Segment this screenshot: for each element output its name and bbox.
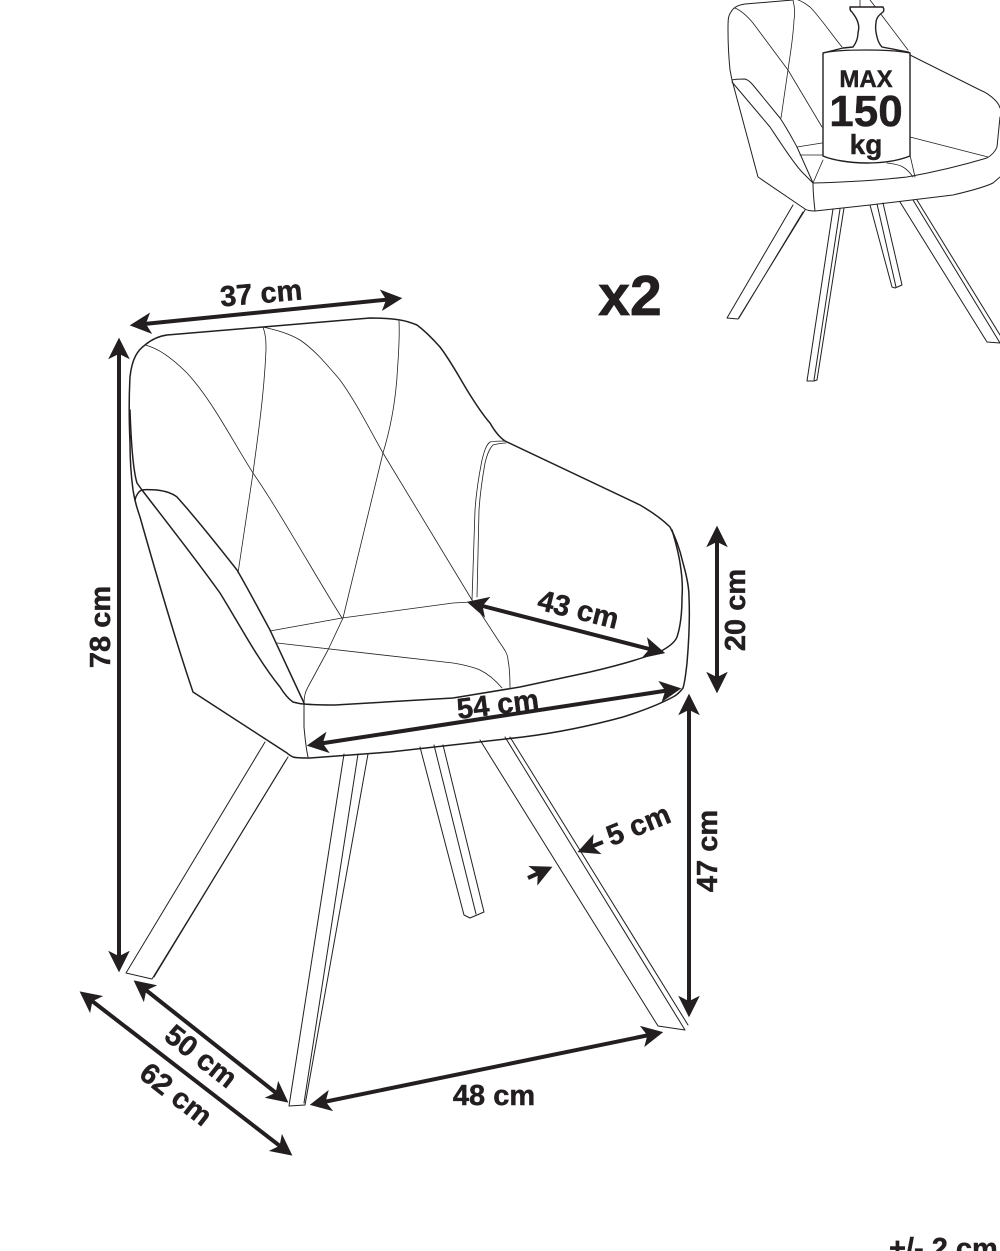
- right leg: [480, 737, 688, 1030]
- seat front edge: [304, 530, 682, 705]
- dimension: 37 cm: 37 cm: [219, 275, 304, 314]
- dimension: 5 cm: [528, 798, 675, 878]
- dimension: 50 cm: [137, 983, 285, 1100]
- weight icon: kg: [850, 129, 882, 160]
- dimension: 54 cm: [311, 684, 677, 745]
- front-left leg: [126, 742, 288, 979]
- dimension: 47 cm: 47 cm: [692, 810, 724, 892]
- quantity label: x2: x2: [598, 264, 662, 328]
- small chair legs: [727, 205, 805, 319]
- dimension: 62 cm: 62 cm: [133, 1057, 218, 1133]
- small chair line drawing: [727, 0, 1000, 381]
- weight icon: [823, 7, 910, 163]
- back inner edge: [130, 410, 142, 490]
- weight icon: 150: [829, 87, 903, 136]
- chair body outline: [129, 318, 689, 758]
- dimension: 20 cm: 20 cm: [720, 569, 752, 651]
- front-centre leg: [289, 754, 368, 1106]
- main chair line drawing: [126, 318, 689, 1106]
- rear leg: [420, 745, 484, 918]
- dimension: 5 cm: 5 cm: [602, 798, 675, 853]
- dimension: 43 cm: [471, 585, 661, 652]
- dimension: 78 cm: 78 cm: [85, 586, 117, 668]
- left armrest: [135, 490, 304, 703]
- dimension: 50 cm: 50 cm: [158, 1019, 243, 1095]
- dimension: 43 cm: 43 cm: [534, 585, 622, 636]
- dimension: 48 cm: 48 cm: [453, 1080, 535, 1112]
- dimension: 37 cm: [134, 275, 398, 325]
- dimension: 54 cm: 54 cm: [455, 684, 541, 726]
- front corner edge: [304, 703, 308, 757]
- back and seat seams: [145, 345, 342, 618]
- right armrest inner double seam: [472, 441, 505, 600]
- weight icon: MAX: [839, 66, 893, 93]
- dimension: 62 cm: [83, 994, 289, 1153]
- weight capacity illustration: [727, 0, 1000, 381]
- dimension: 48 cm: [314, 1033, 659, 1112]
